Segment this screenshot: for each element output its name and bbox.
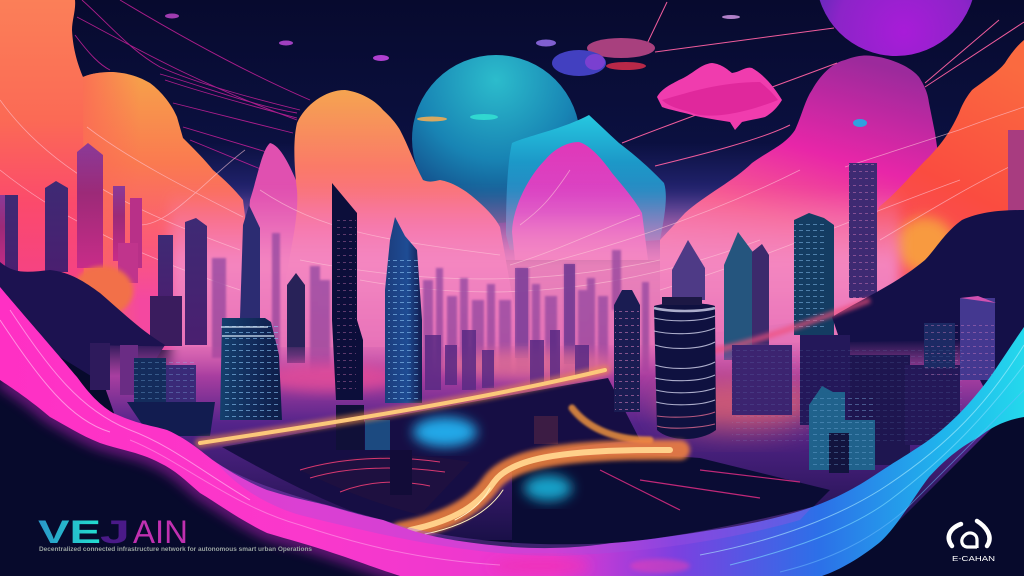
warm ground glow across the city [260, 300, 870, 431]
logo: wordmark: AIN [133, 514, 188, 550]
foreground skyscrapers [220, 183, 875, 473]
mid city blocks centre [425, 330, 589, 390]
mid city blocks left [90, 343, 215, 436]
orange glow behind the left hill [73, 266, 133, 316]
dark hills left and right [0, 210, 1024, 400]
cloud blend: soft join between column and bump [83, 72, 133, 320]
left towers [0, 143, 305, 363]
sky wires: pink right [622, 2, 1024, 166]
drum stripes [654, 308, 715, 428]
cloud glow: yellow orange right [895, 217, 955, 273]
ribbon: glass rail panels [217, 463, 812, 574]
glowing roads [200, 370, 680, 534]
tower: tall black slab [332, 183, 363, 400]
pink haze behind the skyline [170, 190, 900, 430]
ribbon: light streaks [0, 310, 1024, 572]
logo: tagline: Decentralized connected infrastructure network for autonomous smart urban Operations [39, 546, 312, 553]
tower: glass spire [385, 217, 422, 403]
road: upper bridge [200, 370, 605, 443]
flying ship: blimp [552, 38, 655, 76]
tower: narrow stripes [614, 290, 640, 412]
flying ship: pink cloud [657, 63, 782, 130]
mountain: pink peak [512, 142, 648, 260]
road: lower light trail [400, 450, 680, 532]
tower: teal cluster right [809, 386, 875, 470]
far skyline [212, 233, 649, 400]
sphere: teal planet [412, 55, 580, 223]
ribbon glow [0, 380, 400, 576]
logo: arch emblem [949, 521, 995, 563]
night sky [0, 0, 1024, 260]
clouds: left pink mountain [240, 143, 340, 340]
mountain: blue peak [506, 115, 666, 250]
tower windows [221, 215, 874, 467]
small flying craft [165, 14, 867, 127]
light streaks: pale lines over clouds [0, 100, 1024, 292]
clouds: far right orange [850, 40, 1024, 340]
clouds: left orange bump [70, 72, 262, 350]
logo: wordmark: VE [38, 514, 101, 550]
sphere: purple moon [816, 0, 976, 56]
clouds: far right magenta [660, 55, 960, 340]
tower: left round block [220, 318, 282, 420]
clouds: centre orange bump [280, 90, 520, 340]
logo: wordmark: J [100, 514, 130, 550]
right towers [515, 130, 1024, 364]
road: curved orange loop [572, 408, 650, 440]
ribbon: neon band sweeping across the bottom [0, 287, 1024, 576]
sky wires: magenta left [75, 0, 310, 170]
dark water under the roads [222, 378, 830, 548]
mid city blocks right [732, 296, 996, 465]
logo: arch emblem: E-CAHAN [952, 556, 995, 563]
dark lower background [0, 260, 1024, 576]
tower: centre striped drum [654, 303, 716, 439]
lower city mass [90, 340, 1000, 540]
clouds: top left column [0, 0, 84, 350]
tower: dark block in the teal cluster [829, 433, 849, 473]
logo: wordmark [38, 514, 188, 550]
